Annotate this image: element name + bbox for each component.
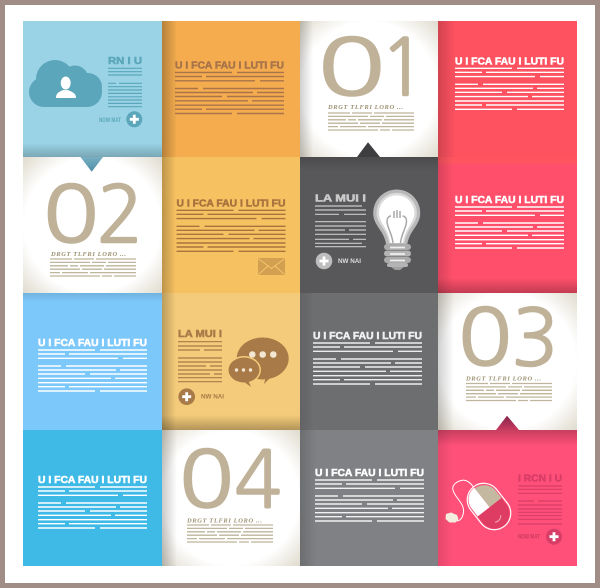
panel: slate text	[300, 430, 438, 566]
label: more: NW NAI	[201, 394, 224, 400]
icon: plus button	[316, 253, 332, 269]
text lines: step 01	[328, 113, 414, 130]
caption: step 04: DRGT TLFRI LORO ...	[186, 518, 262, 524]
icon: chat bubbles	[227, 338, 289, 387]
text lines: mouse panel	[518, 486, 562, 524]
heading: grey panel: U I FCA FAU I LUTI FU	[313, 331, 422, 342]
panel: tan with chat bubbles	[162, 293, 300, 430]
text lines: slate panel	[315, 480, 424, 521]
number 02: 0	[43, 177, 99, 254]
panel: step 04	[162, 430, 300, 566]
panel: cloud info	[23, 21, 162, 157]
icon: light bulb	[373, 189, 420, 270]
heading: mouse panel: I RCN I U	[518, 474, 562, 484]
number 01	[317, 29, 427, 108]
icon: envelope	[258, 258, 285, 275]
caption: step 01: DRGT TLFRI LORO ...	[327, 104, 403, 111]
panel: cyan text	[23, 430, 162, 566]
text lines: step 04	[187, 525, 273, 542]
panel: pink text	[438, 157, 577, 293]
arrow: step 03 pointer	[496, 416, 519, 430]
panel: dark with light bulb	[300, 157, 438, 293]
number 01: 0	[317, 29, 386, 107]
number 03: 3	[511, 300, 559, 378]
panel: yellow text with envelope	[162, 157, 300, 293]
label: more: NOW MAT	[518, 534, 540, 540]
panel: pink with mouse	[438, 430, 577, 566]
text lines: yellow panel	[176, 210, 286, 251]
number 04: 4	[234, 442, 282, 520]
panel: step 02	[23, 157, 162, 293]
heading: yellow panel: U I FCA FAU I LUTI FU	[176, 198, 286, 210]
panel: red text	[438, 21, 577, 157]
panel: light blue text	[23, 293, 162, 430]
heading: tan panel: LA MUI I	[178, 329, 222, 340]
text lines: orange panel	[175, 72, 284, 114]
icon: computer mouse	[446, 477, 517, 536]
text lines: step 02	[50, 259, 136, 276]
text lines: red panel	[455, 68, 564, 109]
text lines: light blue panel	[38, 350, 147, 391]
text lines: tan panel	[178, 342, 222, 382]
text lines: grey panel	[313, 343, 422, 384]
icon: plus button	[178, 388, 195, 405]
number 03	[458, 300, 559, 378]
heading: light blue panel: U I FCA FAU I LUTI FU	[38, 338, 147, 349]
heading: cyan panel: U I FCA FAU I LUTI FU	[38, 475, 147, 486]
number 02	[43, 176, 144, 254]
heading: orange panel: U I FCA FAU I LUTI FU	[175, 61, 284, 72]
panel: orange text	[162, 21, 300, 157]
number 02: 2	[96, 176, 144, 254]
text lines: pink panel	[455, 207, 564, 248]
heading: pink panel: U I FCA FAU I LUTI FU	[455, 195, 564, 206]
number 01: 1	[379, 30, 427, 108]
text lines: cyan panel	[38, 487, 147, 528]
heading: cloud panel: RN I U	[108, 56, 142, 67]
icon: plus button	[546, 529, 562, 545]
panel: step 01	[300, 21, 438, 157]
number 04: 0	[179, 441, 234, 519]
caption: step 02: DRGT TLFRI LORO ...	[50, 251, 126, 258]
arrow: step 01 pointer	[357, 142, 380, 157]
heading: dark panel: LA MUI I	[315, 194, 366, 205]
text lines: dark panel	[315, 206, 366, 247]
heading: red panel: U I FCA FAU I LUTI FU	[455, 56, 564, 68]
icon: plus button	[126, 111, 142, 127]
label: more: NOW MAT	[99, 118, 121, 124]
arrow: step 02 pointer	[80, 157, 103, 172]
number 04	[179, 441, 282, 520]
panel: grey text	[300, 293, 438, 430]
text lines: cloud panel	[108, 68, 142, 107]
number 03: 0	[458, 300, 512, 378]
panel: step 03	[438, 293, 577, 430]
icon: cloud with person	[29, 60, 102, 107]
text lines: step 03	[466, 384, 552, 400]
caption: step 03: DRGT TLFRI LORO ...	[465, 376, 541, 382]
heading: slate panel: U I FCA FAU I LUTI FU	[315, 468, 424, 479]
label: more: NW NAI	[338, 259, 361, 265]
